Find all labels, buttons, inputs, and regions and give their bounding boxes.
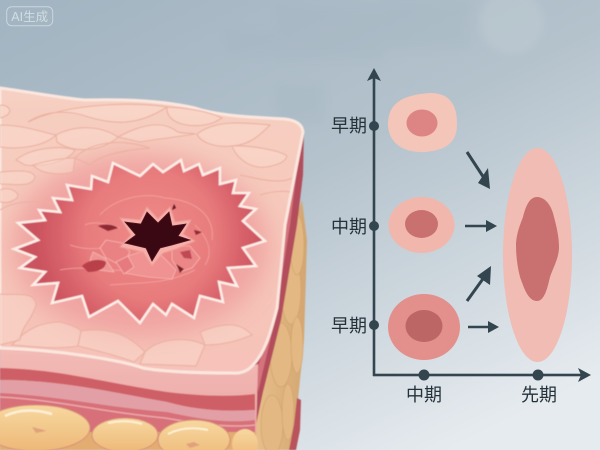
inflamed tissue texture — [60, 196, 212, 285]
x labels: 先期 — [521, 385, 557, 405]
y labels: 中期 — [331, 217, 367, 237]
AI badge — [7, 7, 53, 26]
merged lesion — [503, 148, 572, 362]
inflamed halo — [12, 153, 268, 337]
y labels — [331, 116, 367, 336]
skin cross-section illustration — [0, 88, 307, 450]
arrow: late to merged — [468, 321, 499, 333]
arrow: early to merged — [467, 152, 490, 189]
front layers — [0, 346, 258, 440]
chart — [331, 68, 591, 405]
y labels: 早期 — [331, 116, 367, 136]
late lesion — [388, 294, 460, 360]
arrow: late up to merged — [467, 266, 491, 301]
crater rim — [120, 207, 195, 266]
x labels — [406, 385, 557, 405]
x axis — [373, 368, 591, 382]
skin cells — [0, 104, 292, 366]
AI badge: AI生成 — [11, 10, 48, 24]
side face: fat — [252, 200, 307, 450]
tissue fragments — [82, 204, 202, 279]
fat lobules — [0, 405, 258, 450]
early lesion — [388, 93, 457, 152]
skin top surface — [0, 88, 303, 373]
arrow: middle to merged — [465, 220, 497, 232]
middle lesion — [388, 197, 454, 253]
x labels: 中期 — [406, 385, 442, 405]
side face: dermis stripe — [254, 128, 304, 425]
y axis — [367, 68, 381, 376]
y labels: 早期 — [331, 316, 367, 336]
axis markers — [369, 121, 544, 380]
ulcer — [14, 160, 265, 323]
hole — [125, 212, 190, 261]
